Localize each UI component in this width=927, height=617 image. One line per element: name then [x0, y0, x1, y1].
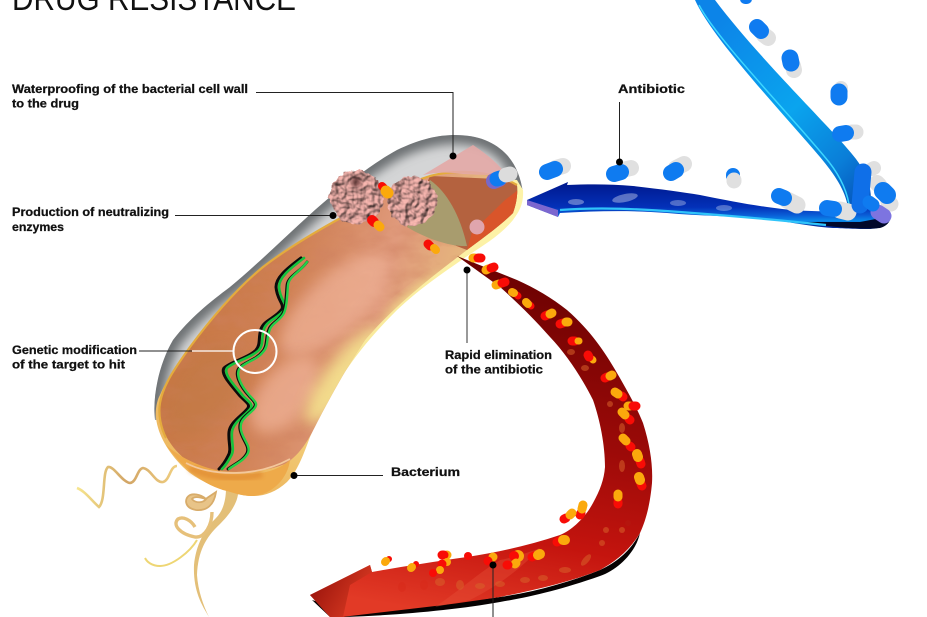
olive lens [407, 180, 467, 246]
label: bacterium [290, 465, 460, 479]
red arrow [310, 256, 652, 617]
label: neutralizing enzymes [12, 205, 336, 234]
label: antibiotic: Antibiotic [618, 82, 686, 96]
blue arrow [527, 0, 891, 229]
interior surface [160, 173, 518, 472]
label: genetic modification: of the target to hit [12, 358, 125, 372]
callout line: bottom of red arrow [490, 562, 496, 617]
label: neutralizing enzymes: enzymes [12, 220, 64, 234]
faded capsules inside the arrow [398, 349, 631, 592]
label: waterproofing: to the drug [12, 96, 79, 110]
label: genetic modification: Genetic modification [12, 343, 137, 357]
label: bacterium: Bacterium [391, 465, 460, 479]
flagella [77, 466, 238, 617]
antibiotic capsules (blue) [494, 0, 891, 216]
yellow cell body [156, 179, 523, 496]
label: rapid elimination [445, 266, 552, 376]
panel: grey membrane shell [154, 135, 522, 420]
label: rapid elimination: of the antibiotic [445, 362, 543, 376]
eliminated capsules (red and orange) [372, 186, 642, 573]
DNA [219, 258, 307, 469]
label: waterproofing: Waterproofing of the bacterial cell wall [12, 82, 248, 96]
highlight circle [234, 330, 276, 373]
bacterium [154, 135, 524, 496]
pink wedge [423, 145, 507, 176]
enzyme proteins [330, 170, 437, 226]
label: rapid elimination: Rapid elimination [445, 348, 552, 362]
label: antibiotic [616, 82, 686, 166]
label: genetic modification [12, 343, 233, 372]
lower rim [166, 445, 290, 496]
label: neutralizing enzymes: Production of neutralizing [12, 205, 169, 219]
top right wedge [407, 176, 520, 250]
label: waterproofing [12, 82, 456, 160]
